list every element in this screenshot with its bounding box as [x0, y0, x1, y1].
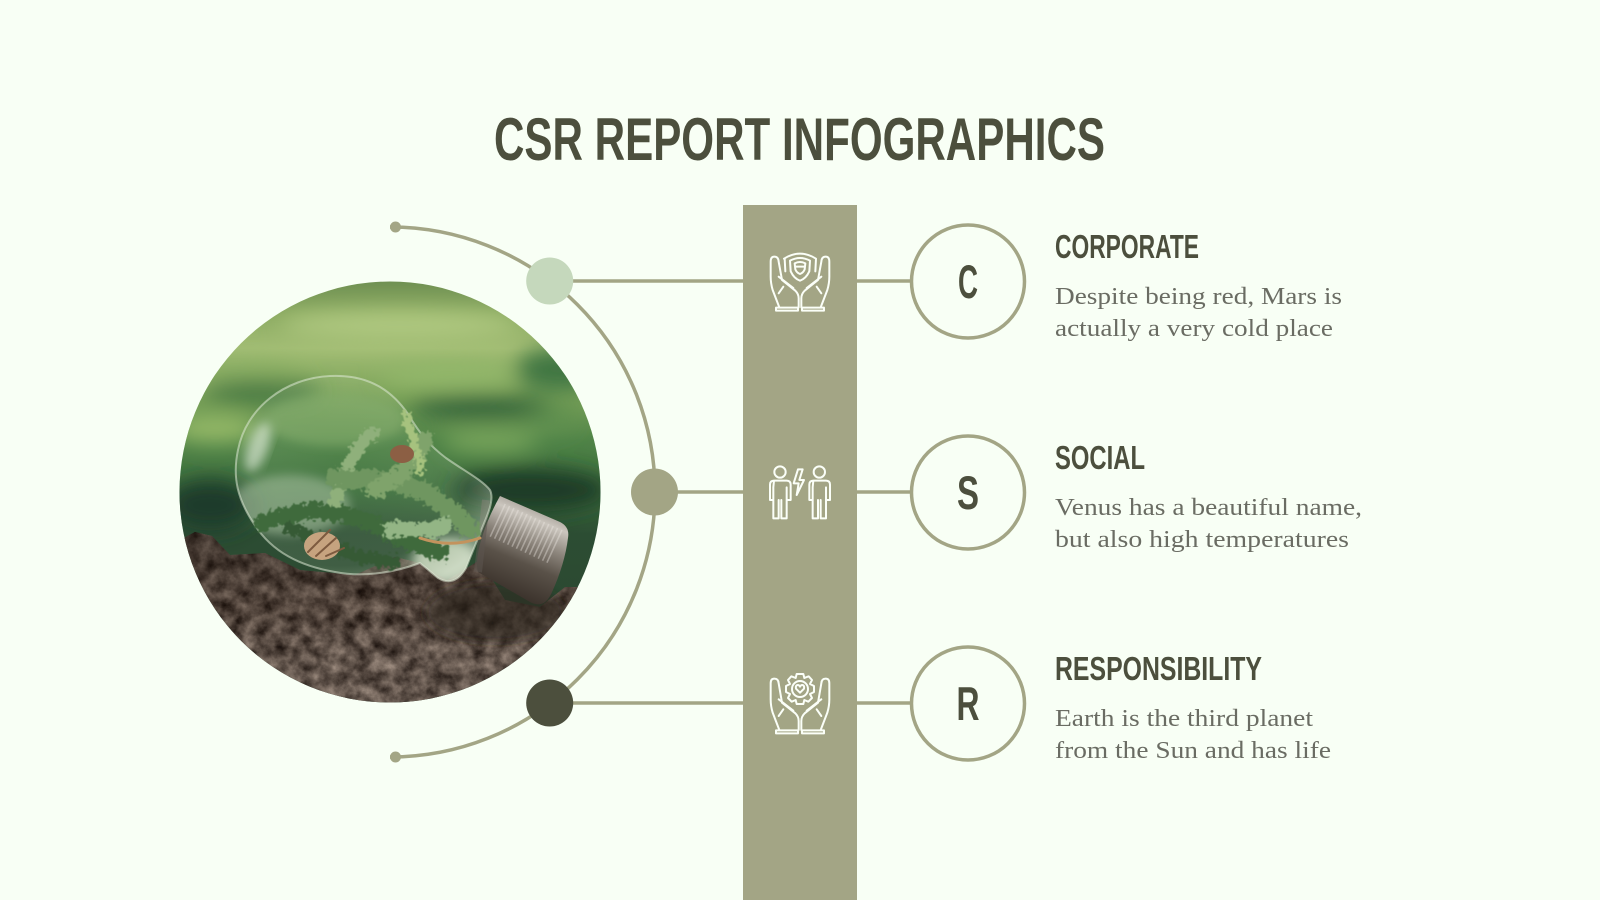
letter circle C	[912, 225, 1024, 338]
letter circle R: R	[956, 677, 980, 730]
body: responsibility: from the Sun and has life	[1055, 738, 1331, 764]
body: social	[1055, 495, 1362, 553]
arc end dot: top	[390, 222, 401, 232]
body: responsibility: Earth is the third planet	[1055, 706, 1313, 732]
heading: responsibility: RESPONSIBILITY	[1055, 650, 1262, 687]
letter circle S: S	[957, 466, 979, 519]
body: corporate	[1055, 284, 1342, 342]
body: social: Venus has a beautiful name,	[1055, 495, 1362, 521]
heading: corporate: CORPORATE	[1055, 228, 1199, 265]
photo: light bulb with plant on soil	[165, 281, 610, 703]
orbit arc	[390, 227, 655, 757]
node: top light green	[526, 258, 573, 304]
soil	[180, 532, 601, 703]
plant branches	[262, 415, 480, 562]
arc end dot: bottom	[390, 752, 401, 762]
central vertical bar	[743, 205, 857, 900]
row: social	[912, 436, 1362, 553]
heading: social: SOCIAL	[1055, 439, 1145, 476]
connector lines	[570, 281, 912, 703]
body: corporate: Despite being red, Mars is	[1055, 284, 1342, 310]
row: corporate	[912, 225, 1342, 342]
body: responsibility	[1055, 706, 1331, 764]
node: middle olive	[631, 468, 678, 516]
body: corporate: actually a very cold place	[1055, 316, 1333, 342]
icon: two people with lightning bolt	[770, 466, 830, 518]
icon: hands holding gear with heart	[771, 674, 829, 733]
title: CSR REPORT INFOGRAPHICS	[494, 106, 1105, 173]
bulb socket	[477, 496, 568, 604]
letter circle S	[912, 436, 1024, 549]
icon: hands holding shield	[771, 254, 829, 311]
glass bulb	[230, 376, 491, 582]
letter circle C: C	[958, 255, 978, 308]
body: social: but also high temperatures	[1055, 527, 1349, 553]
node: bottom dark	[526, 680, 573, 726]
letter circle R	[912, 647, 1024, 760]
row: responsibility	[912, 647, 1331, 764]
